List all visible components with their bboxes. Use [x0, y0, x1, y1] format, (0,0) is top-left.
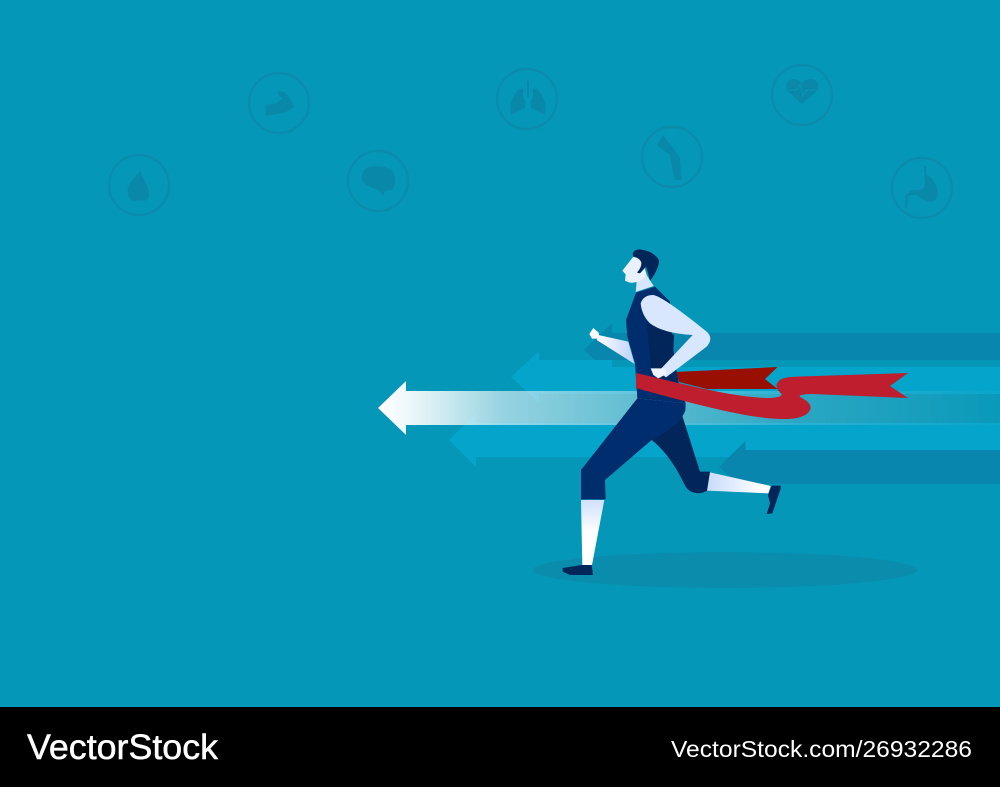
back leg — [652, 403, 710, 493]
front sock — [581, 500, 604, 565]
icon: stomach — [892, 158, 952, 218]
arrow: dark upper — [584, 323, 1000, 376]
neck — [636, 275, 654, 292]
arrow: light lower — [449, 413, 1000, 467]
footer image id: VectorStock.com/26932286 — [671, 736, 972, 762]
hair — [633, 249, 659, 281]
arrow: light upper — [511, 351, 1000, 403]
motion arrows — [378, 323, 1000, 491]
ground shadow — [533, 552, 917, 588]
front leg — [581, 398, 686, 499]
footer bar — [0, 707, 1000, 787]
face — [622, 257, 647, 283]
runner — [563, 249, 781, 575]
far ribbon tail — [675, 367, 778, 389]
near ribbon — [636, 373, 908, 419]
footer logo: VectorStock — [27, 728, 219, 767]
icon: blood drop — [109, 155, 169, 215]
health icons row — [109, 65, 952, 218]
icon: flexed muscle — [249, 73, 309, 133]
icon: brain — [348, 151, 408, 211]
far arm — [589, 328, 635, 364]
back sock — [707, 472, 771, 493]
arrow: white leading — [378, 381, 1000, 435]
torso — [626, 287, 686, 403]
front shoe — [563, 565, 593, 575]
back shoe — [767, 486, 781, 514]
icon: heart with pulse — [772, 65, 832, 125]
fist — [651, 368, 667, 378]
icon: lungs — [497, 69, 557, 129]
chest shadow — [647, 322, 678, 383]
arrow: dark lower — [719, 441, 1000, 491]
near arm — [641, 295, 710, 378]
icon: knee joint — [642, 127, 702, 187]
